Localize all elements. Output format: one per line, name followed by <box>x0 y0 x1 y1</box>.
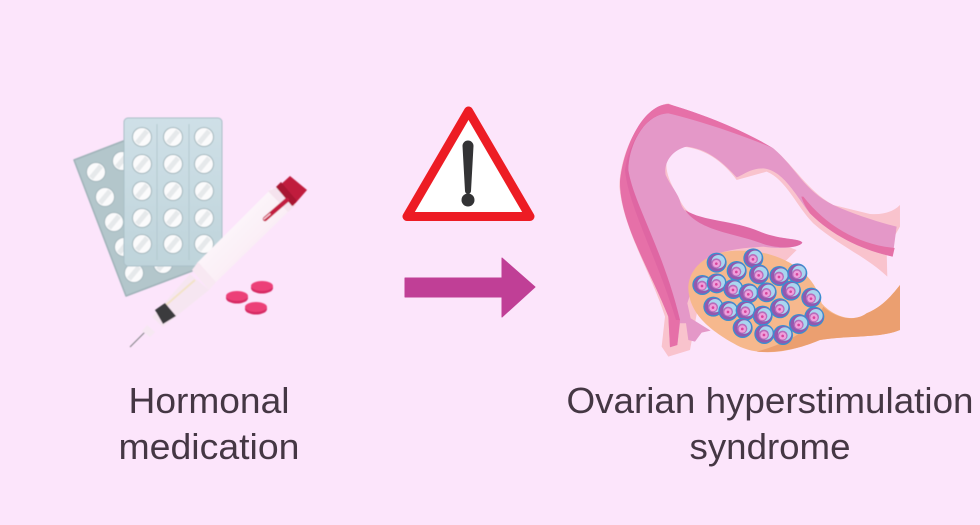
label: hormonal medication <box>118 380 300 467</box>
label: hormonal medication: Hormonal <box>128 380 290 421</box>
tube dark lining left and top <box>620 104 773 347</box>
follicles <box>692 248 824 345</box>
icon: back blister pack <box>74 140 204 296</box>
icon: medication group <box>74 118 307 347</box>
icon: injection pen <box>130 176 307 347</box>
pale outline of tube <box>619 103 900 357</box>
icon: uterus and ovary <box>619 103 900 357</box>
label: ovarian hyperstimulation syndrome: syndrome <box>690 426 850 467</box>
icon: warning triangle <box>407 111 530 216</box>
icon: front blister pack <box>124 118 222 266</box>
lower tube edge <box>801 197 895 257</box>
label: ovarian hyperstimulation syndrome <box>566 380 974 467</box>
icon: pink tablets <box>226 281 273 314</box>
label: hormonal medication: medication <box>118 426 300 467</box>
arrow <box>405 258 535 317</box>
label: ovarian hyperstimulation syndrome: Ovarian hyperstimulation <box>566 380 974 421</box>
ovary <box>688 251 900 352</box>
tube body <box>620 104 897 347</box>
